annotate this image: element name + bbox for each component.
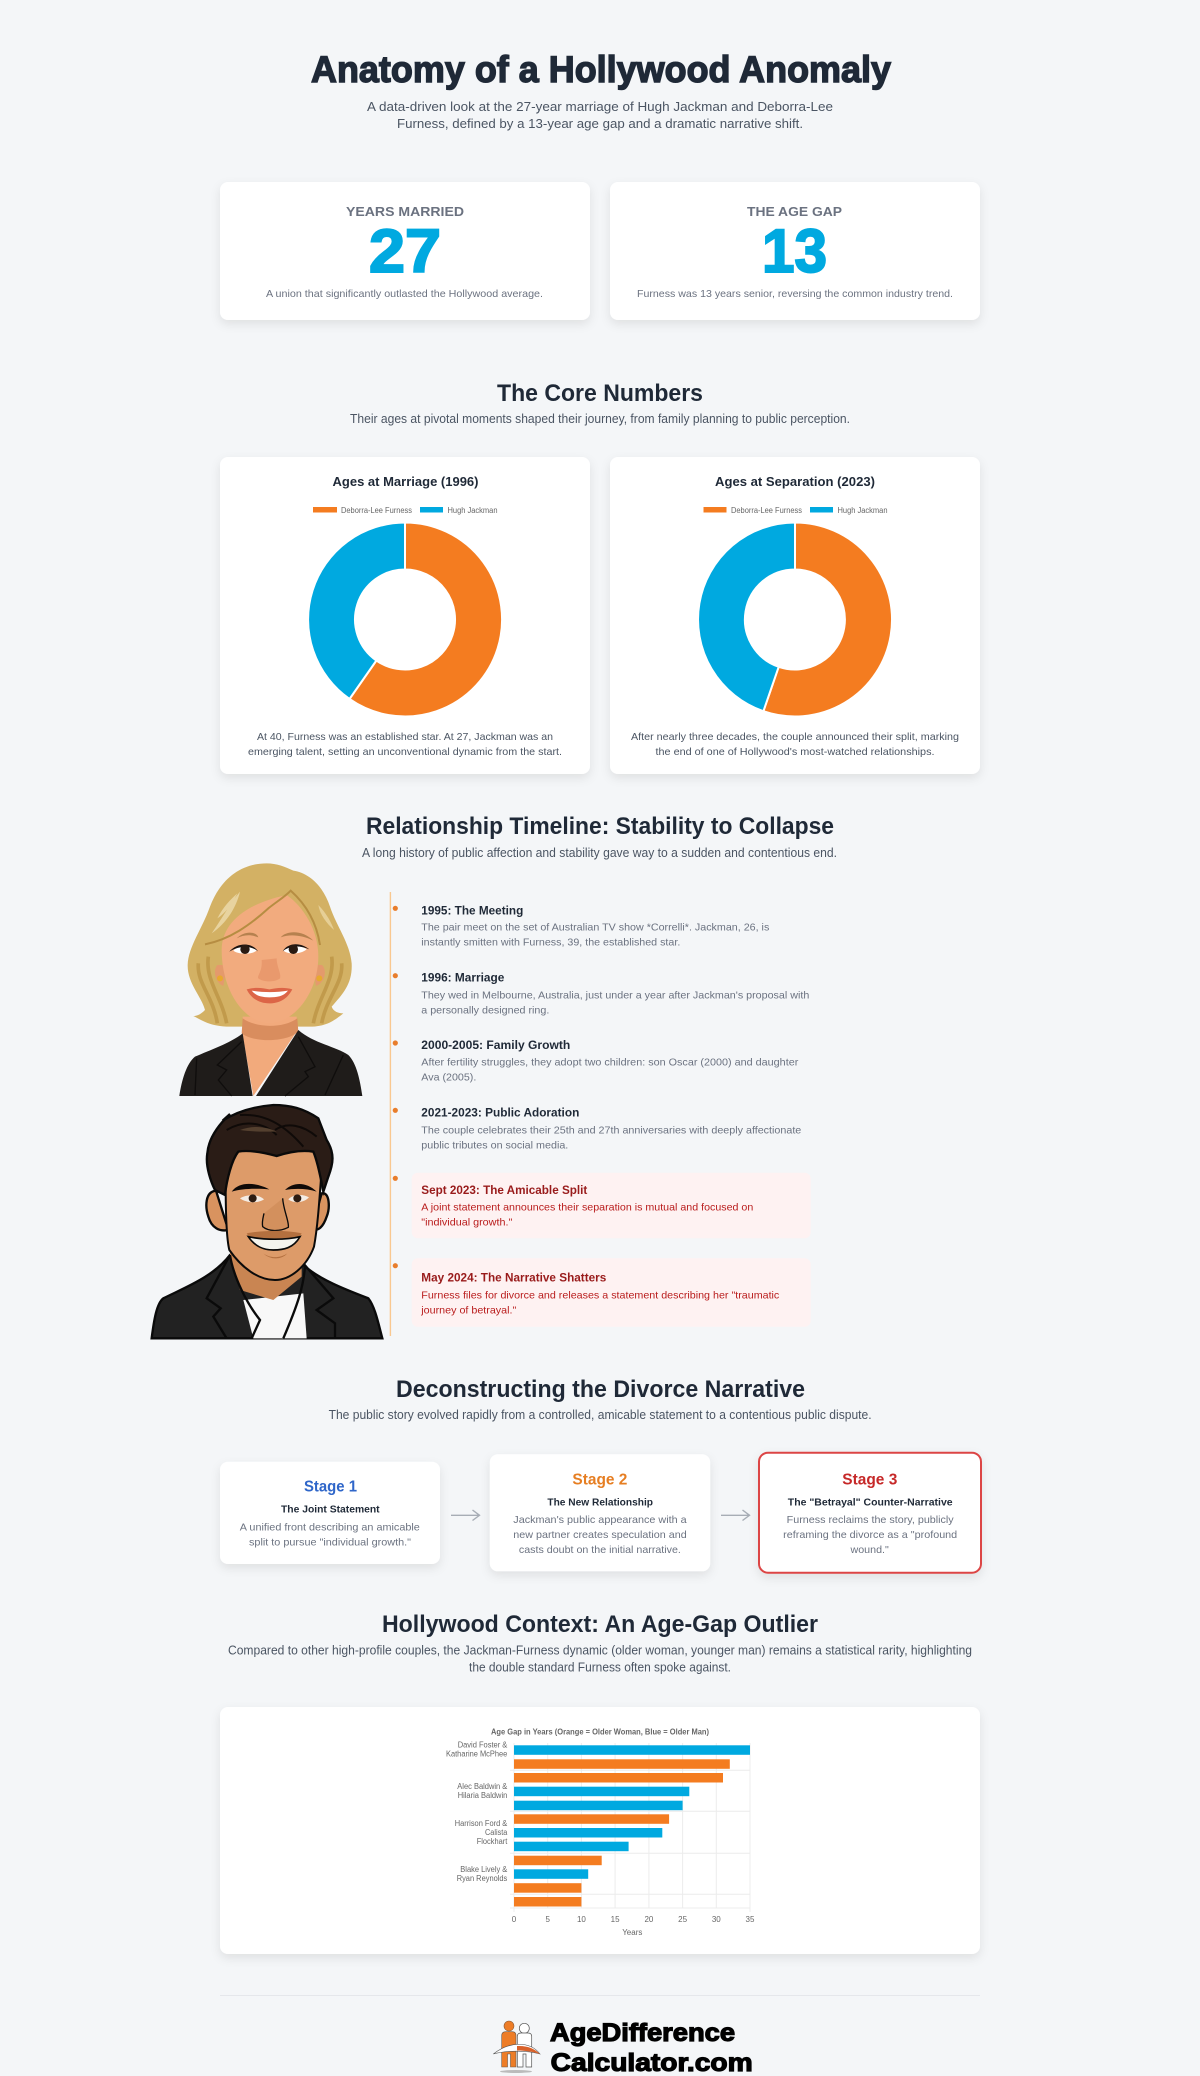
- event: 1996: 1996: Marriage: [421, 973, 504, 985]
- panel: the age gap: [610, 182, 980, 320]
- stage description: [240, 1522, 420, 1549]
- caption: emerging talent, setting an unconventional dynamic from the start.: [248, 746, 562, 758]
- y axis labels: Katharine McPhee: [446, 1750, 508, 1759]
- stage title: The Joint Statement: [281, 1504, 380, 1516]
- y axis labels: Blake Lively &: [460, 1865, 508, 1874]
- wordmark: [550, 2019, 753, 2076]
- legend: Deborra-Lee Furness: [341, 506, 412, 515]
- stat: 13: 13: [762, 217, 827, 285]
- event: 1995: 1995: The Meeting: [421, 905, 523, 917]
- event: 2000-2005: After fertility struggles, they adopt two children: son Oscar (2000) and daughter: [421, 1057, 799, 1069]
- section intro: timeline: A long history of public affection and stability gave way to a sudden and contentious end.: [362, 846, 837, 860]
- y axis labels: Ryan Reynolds: [457, 1874, 507, 1883]
- event: Sept 2023: [393, 1173, 811, 1238]
- stage description: Furness reclaims the story, publicly: [787, 1514, 954, 1526]
- panel: ages at marriage: [220, 457, 590, 774]
- label: years married: YEARS MARRIED: [346, 204, 464, 219]
- icon: portrait of Hugh Jackman: [152, 1105, 382, 1338]
- section intro: context: Compared to other high-profile couples, the Jackman-Furness dynamic (older woman, younger man) remains a statistical rarity, highlighting: [228, 1644, 972, 1658]
- stage description: [783, 1514, 957, 1556]
- stage title: The "Betrayal" Counter-Narrative: [788, 1496, 953, 1508]
- stage description: A unified front describing an amicable: [240, 1522, 420, 1534]
- caption: At 40, Furness was an established star. At 27, Jackman was an: [257, 731, 553, 743]
- stage label: Stage 2: [572, 1471, 627, 1488]
- description: Furness was 13 years senior, reversing the common industry trend.: [637, 288, 953, 300]
- x axis labels: 0: [512, 1915, 517, 1924]
- panel: stage 2: [490, 1454, 710, 1571]
- caption: [248, 731, 562, 758]
- icon: portrait of Deborra-Lee Furness: [179, 863, 362, 1096]
- x axis labels: 20: [644, 1915, 654, 1924]
- stage label: Stage 3: [842, 1471, 897, 1488]
- legend: Hugh Jackman: [448, 506, 498, 515]
- heading: relationship timeline: Relationship Timeline: Stability to Collapse: [366, 813, 834, 840]
- event: Sept 2023: A joint statement announces their separation is mutual and focused on: [421, 1202, 753, 1214]
- y axis labels: Calista: [485, 1828, 508, 1837]
- chart title: Ages at Marriage (1996): [332, 474, 478, 489]
- stage description: new partner creates speculation and: [513, 1529, 687, 1541]
- x axis labels: 10: [577, 1915, 586, 1924]
- event: 2021-2023: public tributes on social media.: [421, 1139, 568, 1151]
- x axis labels: Years: [622, 1928, 642, 1937]
- x axis labels: 25: [678, 1915, 688, 1924]
- label: the age gap: THE AGE GAP: [747, 204, 842, 219]
- title: Anatomy of a Hollywood Anomaly: [311, 49, 891, 90]
- heading: deconstructing the divorce narrative: Deconstructing the Divorce Narrative: [396, 1376, 805, 1403]
- legend: Hugh Jackman: [838, 506, 888, 515]
- caption: the end of one of Hollywood's most-watched relationships.: [656, 746, 934, 758]
- event: May 2024: [393, 1258, 811, 1327]
- caption: After nearly three decades, the couple announced their split, marking: [631, 731, 959, 743]
- event: 1995: [393, 905, 769, 949]
- event: 2021-2023: The couple celebrates their 25th and 27th anniversaries with deeply affectionate: [421, 1124, 801, 1136]
- stage description: split to pursue "individual growth.": [249, 1537, 411, 1549]
- event: 1996: [393, 973, 809, 1016]
- event: 2000-2005: 2000-2005: Family Growth: [421, 1040, 570, 1052]
- y axis labels: Flockhart: [477, 1837, 508, 1846]
- panel: ages at separation: [610, 457, 980, 774]
- event: May 2024: May 2024: The Narrative Shatters: [421, 1273, 606, 1285]
- legend: Deborra-Lee Furness: [731, 506, 802, 515]
- y axis labels: Harrison Ford &: [455, 1819, 508, 1828]
- event: May 2024: Furness files for divorce and releases a statement describing her "traumatic: [421, 1289, 779, 1301]
- subtitle: [367, 100, 833, 131]
- event: Sept 2023: "individual growth.": [421, 1217, 513, 1229]
- stage description: reframing the divorce as a "profound: [783, 1529, 957, 1541]
- x axis labels: 30: [712, 1915, 721, 1924]
- event: 2000-2005: [393, 1040, 799, 1084]
- event: 1995: instantly smitten with Furness, 39, the established star.: [421, 937, 680, 949]
- description: A union that significantly outlasted the Hollywood average.: [266, 288, 543, 300]
- stage description: casts doubt on the initial narrative.: [519, 1544, 681, 1556]
- stat: 27: 27: [369, 217, 441, 285]
- chart title: Ages at Separation (2023): [715, 474, 875, 489]
- event: May 2024: journey of betrayal.": [420, 1304, 517, 1316]
- chart title: Age Gap in Years (Orange = Older Woman, Blue = Older Man): [491, 1726, 709, 1736]
- bar chart: [446, 1726, 755, 1937]
- arrow: stage 2 to stage 3: [721, 1510, 750, 1520]
- panel: stage 1: [220, 1462, 440, 1564]
- y axis labels: [446, 1741, 508, 1883]
- y axis labels: Alec Baldwin &: [457, 1782, 508, 1791]
- x axis labels: 5: [545, 1915, 550, 1924]
- event: Sept 2023: Sept 2023: The Amicable Split: [421, 1185, 587, 1197]
- icon: age difference logo: [493, 2021, 540, 2073]
- panel: years married: [220, 182, 590, 320]
- subtitle: Furness, defined by a 13-year age gap and a dramatic narrative shift.: [397, 117, 803, 131]
- event: 2000-2005: Ava (2005).: [421, 1072, 476, 1084]
- heading: hollywood context: Hollywood Context: An Age-Gap Outlier: [382, 1611, 818, 1638]
- wordmark: AgeDifference: [550, 2019, 735, 2047]
- event: 1996: They wed in Melbourne, Australia, just under a year after Jackman's proposal with: [421, 989, 809, 1001]
- legend: [313, 506, 498, 515]
- section intro: context: the double standard Furness often spoke against.: [469, 1661, 731, 1675]
- section intro: core numbers: Their ages at pivotal moments shaped their journey, from family planning to public perception.: [350, 412, 850, 426]
- event: 1995: The pair meet on the set of Australian TV show *Correlli*. Jackman, 26, is: [421, 922, 769, 934]
- stage description: [513, 1514, 687, 1556]
- arrow: stage 1 to stage 2: [451, 1510, 480, 1520]
- stage description: wound.": [849, 1544, 889, 1556]
- timeline: [390, 892, 811, 1336]
- panel: age gap chart: [220, 1707, 980, 1954]
- legend: [704, 506, 888, 515]
- subtitle: A data-driven look at the 27-year marriage of Hugh Jackman and Deborra-Lee: [367, 100, 833, 114]
- section intro: context: [228, 1644, 972, 1675]
- stage label: Stage 1: [304, 1479, 357, 1496]
- footer divider and logo: [220, 1995, 980, 2076]
- section intro: narrative: The public story evolved rapidly from a controlled, amicable statement to a contentious public dispute.: [329, 1408, 872, 1422]
- heading: the core numbers: The Core Numbers: [497, 380, 703, 407]
- x axis labels: [512, 1915, 755, 1937]
- stage description: Jackman's public appearance with a: [513, 1514, 687, 1526]
- stage title: The New Relationship: [547, 1496, 653, 1508]
- x axis labels: 15: [611, 1915, 620, 1924]
- x axis labels: 35: [746, 1915, 755, 1924]
- donut chart: marriage: [308, 522, 502, 716]
- event: 2021-2023: 2021-2023: Public Adoration: [421, 1108, 579, 1120]
- panel: stage 3: [759, 1453, 981, 1573]
- y axis labels: David Foster &: [458, 1741, 508, 1750]
- event: 1996: a personally designed ring.: [421, 1004, 549, 1016]
- event: 2021-2023: [393, 1108, 801, 1151]
- donut chart: separation: [698, 522, 892, 716]
- y axis labels: Hilaria Baldwin: [458, 1791, 507, 1800]
- caption: [631, 731, 959, 758]
